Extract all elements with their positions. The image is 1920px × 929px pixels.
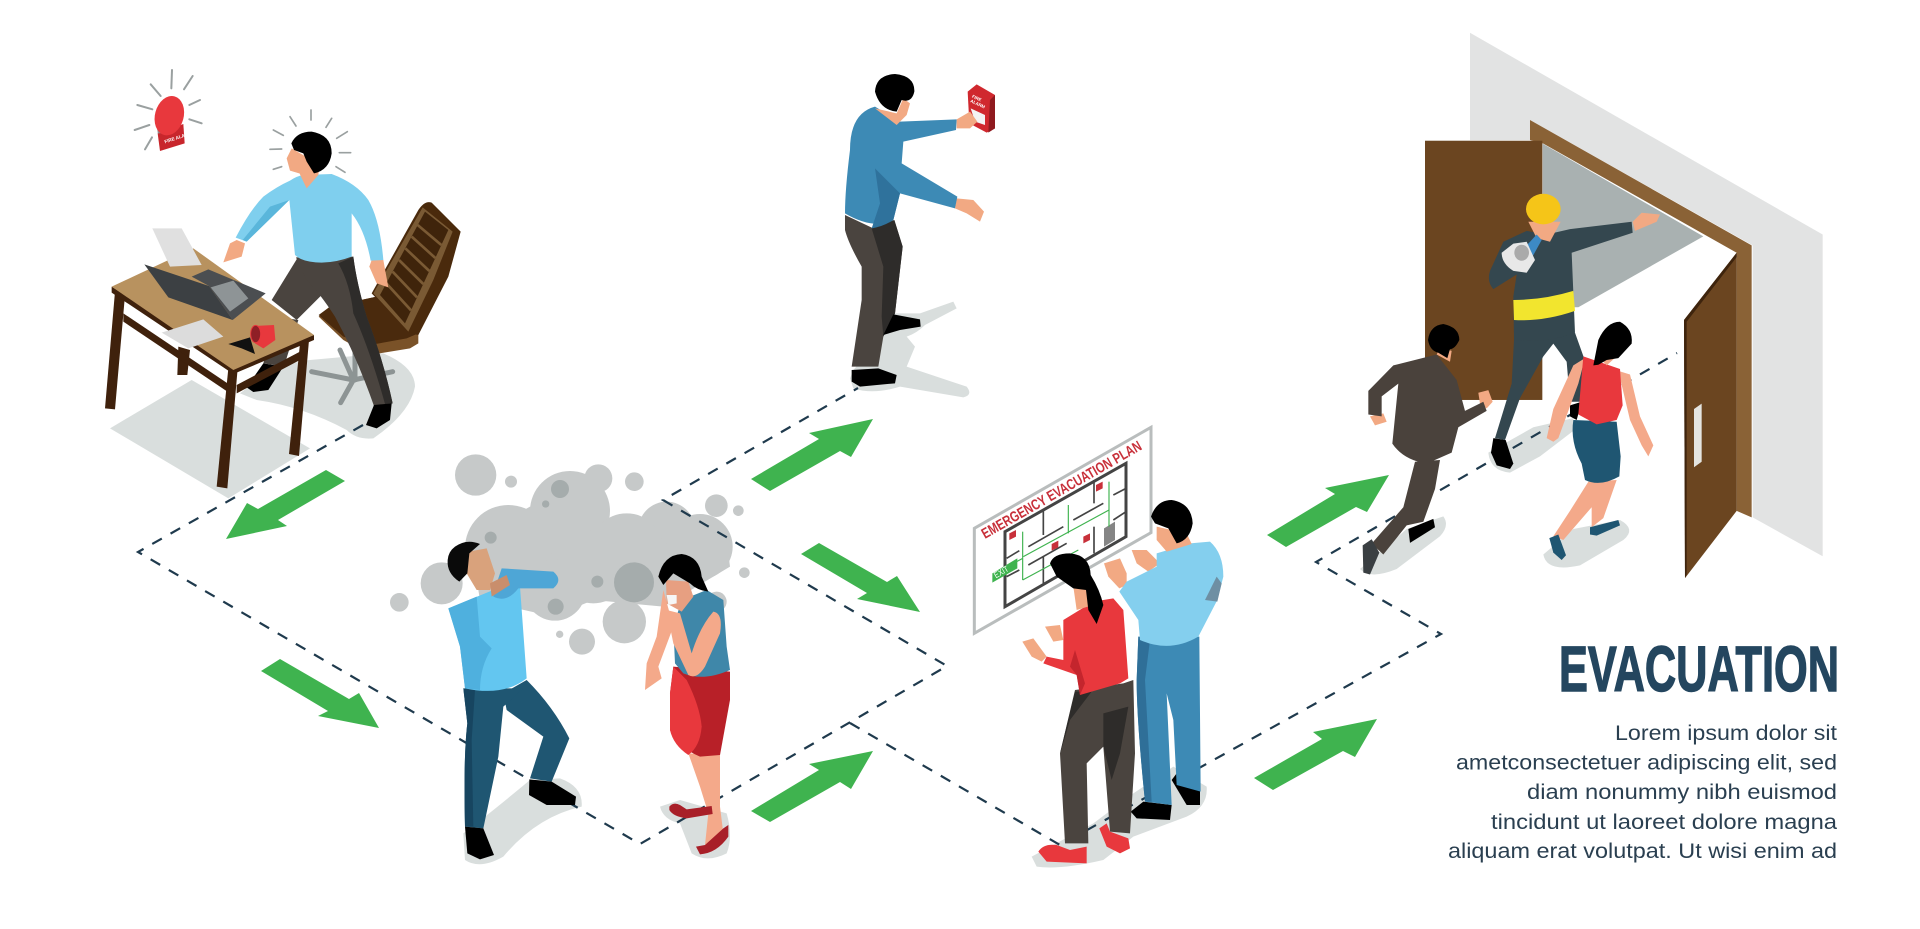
wall fire alarm box: [968, 84, 995, 133]
paper on desk: [152, 228, 202, 267]
exit wall with door frame and open doors: [1425, 33, 1823, 578]
scene 4: evacuation plan board: [974, 427, 1223, 863]
body text: [1448, 721, 1837, 863]
body text: aliquam erat volutpat. Ut wisi enim ad: [1448, 839, 1837, 863]
body text: ametconsectetuer adipiscing elit, sed: [1456, 750, 1837, 774]
wall fire alarm box: FIRE: [971, 94, 982, 102]
wall fire alarm box: ALARM: [970, 98, 986, 110]
body text: tincidunt ut laoreet dolore magna: [1491, 810, 1837, 834]
emergency evacuation plan: EMERGENCY EVACUATION PLAN: [979, 439, 1145, 542]
body text: Lorem ipsum dolor sit: [1615, 721, 1837, 745]
worker standing up in light blue sweater: [223, 132, 393, 428]
sheet of paper: [162, 319, 223, 348]
man coughing in blue sweater: [448, 542, 576, 859]
wooden desk: [105, 248, 314, 488]
man running in dark suit: [1363, 324, 1493, 574]
emergency evacuation plan: [974, 427, 1151, 633]
fireman with megaphone: [1489, 194, 1660, 469]
woman walking to exit: [1547, 322, 1653, 560]
icon: red fire alarm bell: FIRE ALARM: [164, 131, 193, 144]
icon: red fire alarm bell: [135, 70, 202, 151]
floor shadows under the first worker and desk: [110, 353, 415, 498]
man in blue sweater: [845, 74, 984, 387]
open laptop: [144, 264, 266, 320]
smoke cloud: [390, 454, 750, 655]
woman viewing plan: [1022, 553, 1135, 863]
scene 1: office worker hears alarm: [105, 70, 461, 488]
woman covering face with tissue: [645, 554, 730, 854]
green direction arrows: [226, 419, 1389, 822]
scene 2: people choking in smoke: [448, 542, 730, 859]
office chair: [312, 202, 461, 403]
scene 5: fireman directs people out the exit: [1363, 194, 1660, 574]
icon: surprise lines around head: [270, 110, 351, 172]
dashed evacuation route: [138, 353, 1677, 845]
man viewing plan: [1104, 500, 1223, 820]
body text: diam nonummy nibh euismod: [1527, 780, 1837, 804]
spilled red mug: [228, 325, 275, 354]
floor shadows under remaining people: [463, 302, 1629, 867]
scene 3: man pressing fire alarm: [845, 74, 995, 387]
emergency evacuation plan: EXIT: [992, 563, 1011, 580]
